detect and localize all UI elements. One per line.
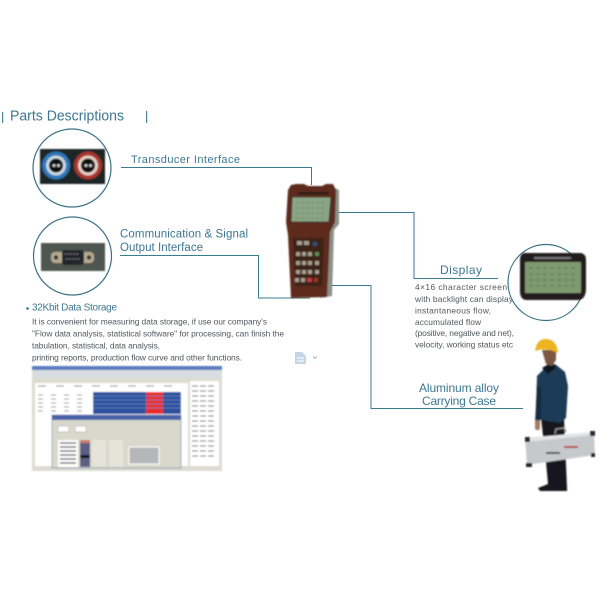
label: Aluminum alloy Carrying Case [419, 381, 499, 408]
text block: data storage description: It is convenient for measuring data storage, if use our company's [32, 316, 267, 326]
label: Communication and Signal Output Interface: Output Interface [120, 242, 203, 254]
text block: display description [414, 282, 514, 350]
connector: carrying case to device [328, 286, 523, 408]
text block: data storage description: "Flow data analysis, statistical software" for processing, can finish the [32, 328, 284, 338]
icon: document with dropdown arrow [295, 352, 317, 364]
icon: transducer interface circle [33, 129, 111, 207]
text block: display description: (positive, negative and net), [415, 328, 514, 338]
text block: data storage description: tabulation, statistical, data analysis, [32, 340, 160, 350]
icon: communication interface circle [34, 217, 112, 295]
text block: display description: with backlight can display [414, 294, 514, 304]
text block: data storage description [32, 316, 284, 362]
connector: communication interface to device [120, 256, 310, 298]
text block: data storage description: printing reports, production flow curve and other functions. [32, 352, 242, 362]
label: Display: Display [440, 263, 482, 277]
label: Communication and Signal Output Interface: Communication & Signal [120, 228, 248, 240]
text block: display description: accumulated flow [415, 317, 482, 327]
heading: 32Kbit Data Storage: 32Kbit Data Storage [32, 302, 117, 314]
connector: transducer interface to device [121, 168, 312, 185]
illustration: worker holding aluminum case [525, 339, 595, 491]
text block: display description: 4×16 character screen [415, 282, 507, 292]
device: handheld flow meter [286, 184, 339, 298]
text block: display description: instantaneous flow, [415, 306, 491, 316]
text block: display description: velocity, working status etc [415, 340, 513, 350]
label: Transducer Interface: Transducer Interface [131, 154, 240, 166]
label: Aluminum alloy Carrying Case: Aluminum alloy [419, 381, 499, 395]
connector: display to device [338, 212, 498, 278]
heading: Parts Descriptions: Parts Descriptions [10, 108, 124, 124]
screenshot: flow data analysis software [32, 366, 222, 471]
label: Aluminum alloy Carrying Case: Carrying Case [422, 394, 496, 408]
label: Communication and Signal Output Interface [120, 228, 248, 254]
icon: display screen circle [508, 244, 586, 320]
